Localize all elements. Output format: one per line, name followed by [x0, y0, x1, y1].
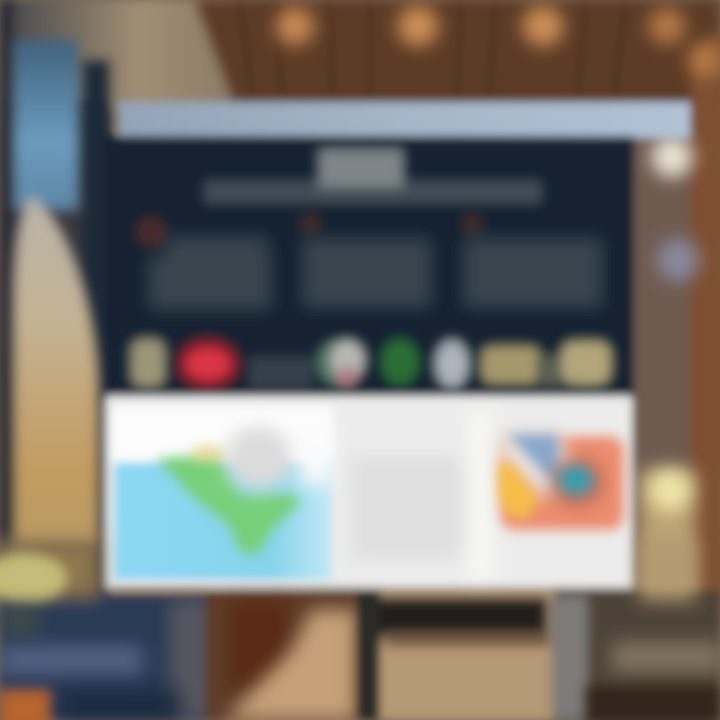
dark board panel [104, 136, 634, 398]
centre text block [350, 455, 470, 560]
column icons [135, 212, 484, 248]
map: grey circle [225, 426, 293, 490]
donut chart [495, 430, 624, 530]
white lower board panel [106, 396, 632, 588]
board stand pole [356, 590, 380, 720]
bottom right: dark furniture [552, 540, 720, 720]
map: yellow tint [190, 445, 226, 461]
bottom: seating [0, 540, 215, 720]
column text blocks [148, 236, 603, 310]
ceiling lights [276, 6, 685, 46]
map: green landmass [156, 454, 300, 556]
map [114, 406, 332, 580]
ceiling: wooden slats [195, 0, 720, 105]
right wall: wooden column and lamps [640, 30, 720, 610]
row of coloured badges [130, 337, 612, 391]
bottom: wood and floor [205, 590, 560, 720]
heading placeholder [204, 148, 542, 204]
left wall: dark strip and blue panel [0, 0, 110, 540]
board header strip [118, 102, 690, 138]
left column: cream arch [14, 196, 98, 545]
